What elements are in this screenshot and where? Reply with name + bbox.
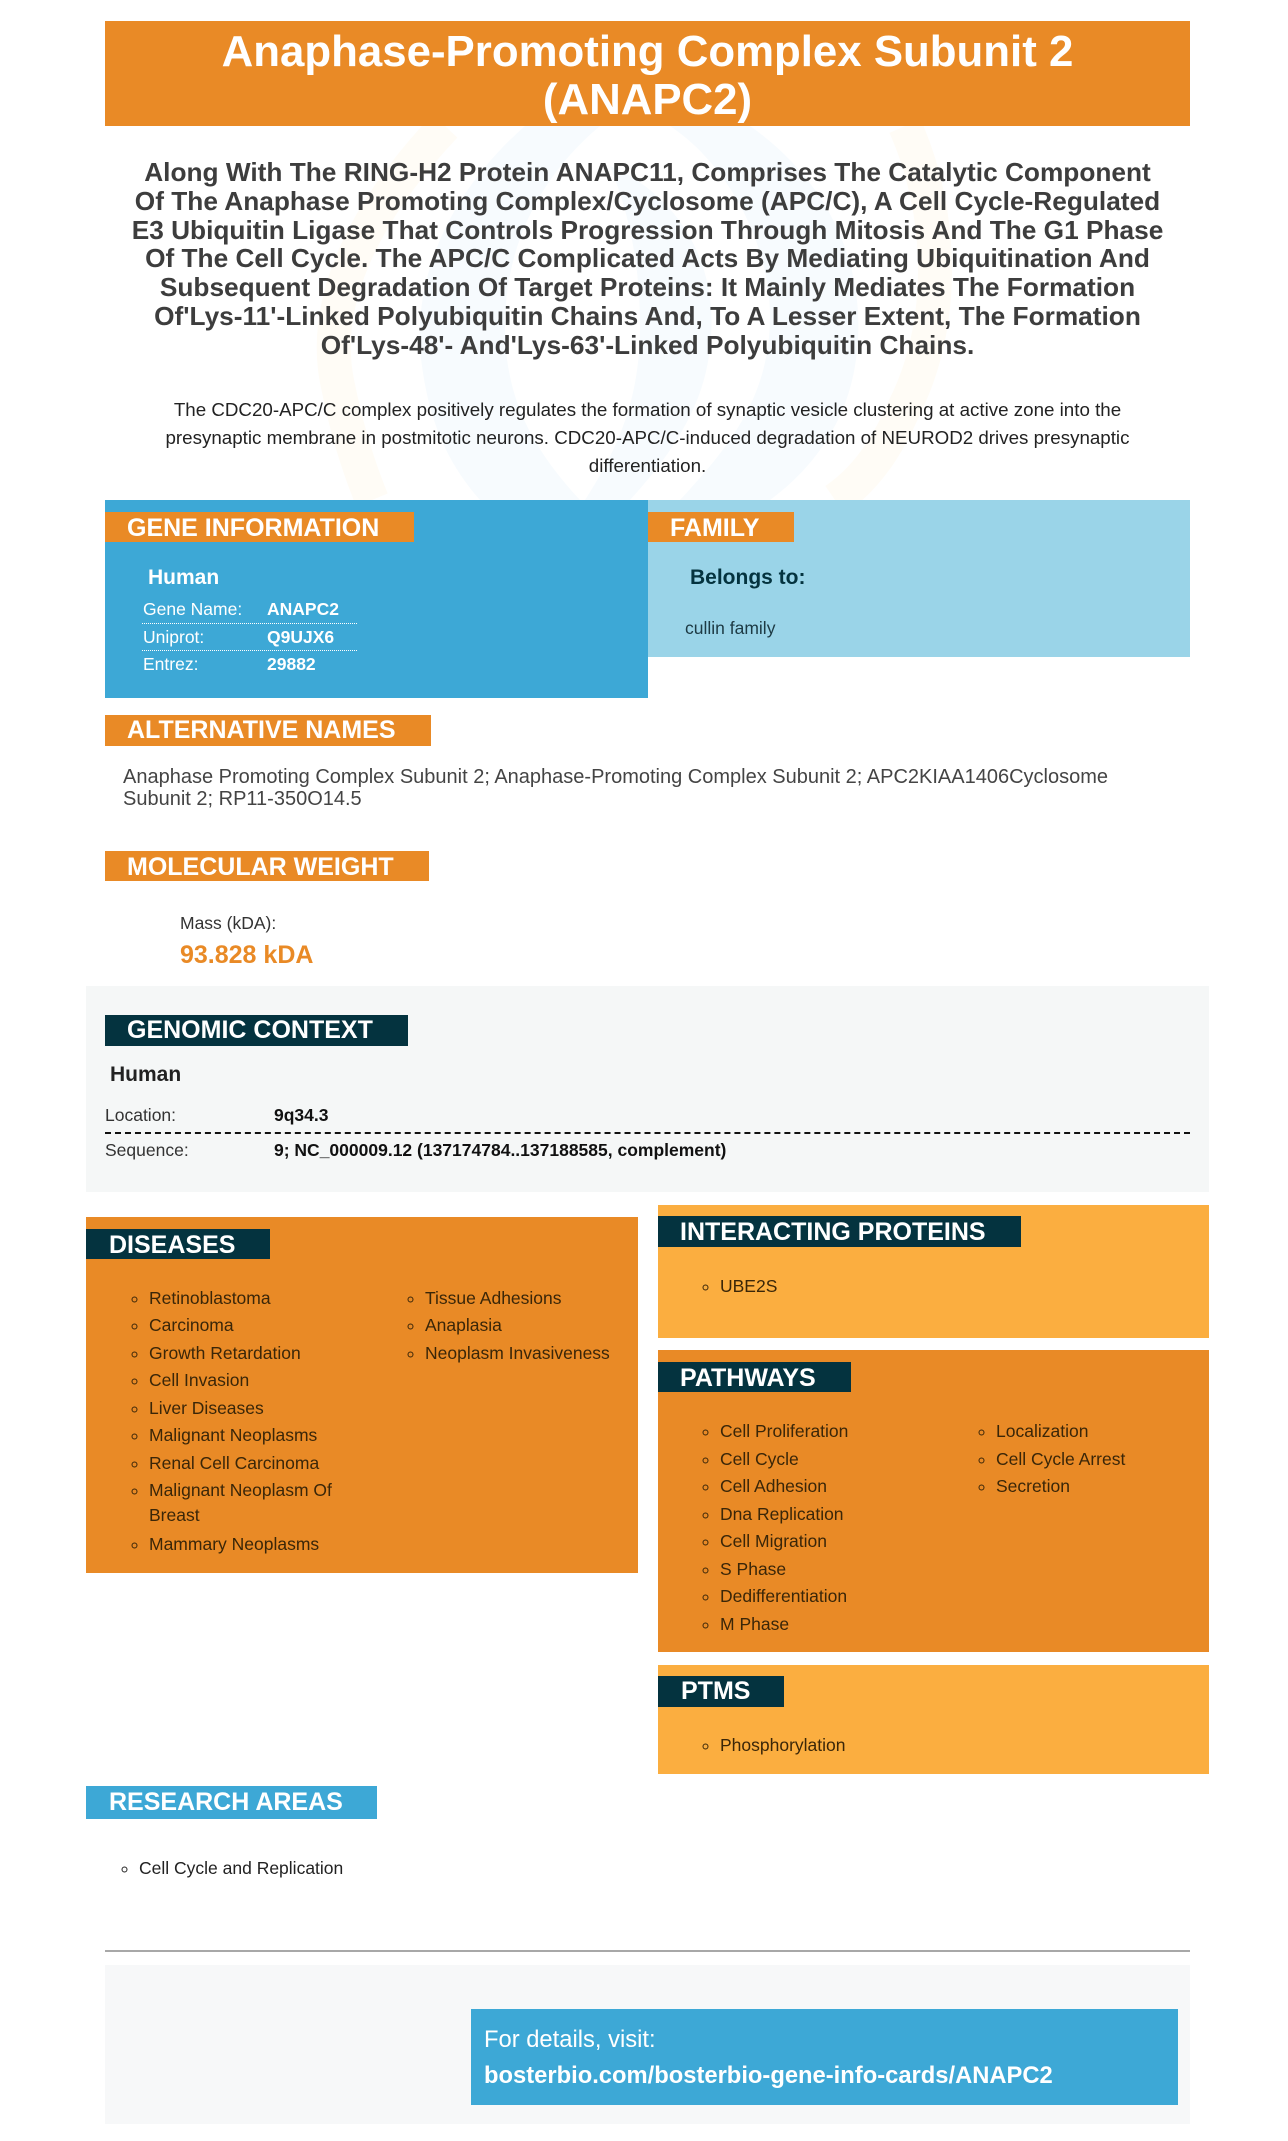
subtitle text: E3 Ubiquitin Ligase That Controls Progression Through Mitosis And The G1 Phase: [132, 215, 1163, 245]
species label: Human: [110, 1063, 181, 1086]
pathways list column 1: Cell Proliferation: [720, 1421, 848, 1441]
callout: details link: For details, visit:: [484, 2026, 656, 2053]
heading: family: [648, 512, 794, 542]
heading: molecular weight: MOLECULAR WEIGHT: [127, 853, 394, 881]
heading: ptms: PTMS: [681, 1677, 750, 1705]
pathways list column 1: Dna Replication: [720, 1504, 844, 1524]
heading: diseases: [86, 1229, 270, 1259]
panel: footer: [105, 1965, 1190, 2124]
pathways list column 2: Localization: [996, 1421, 1088, 1441]
gene info rows: ANAPC2: [267, 599, 339, 619]
heading: family: FAMILY: [670, 514, 759, 542]
subtitle text: Of'Lys-48'- And'Lys-63'-Linked Polyubiquitin Chains.: [321, 330, 974, 360]
ptms list: Phosphorylation: [720, 1735, 846, 1755]
pathways list column 2: [978, 1421, 1126, 1496]
pathways list column 1: S Phase: [720, 1558, 786, 1578]
heading: gene information: GENE INFORMATION: [127, 514, 379, 542]
diseases list column 1: Growth Retardation: [149, 1342, 301, 1362]
diseases list column 1: Mammary Neoplasms: [149, 1534, 319, 1554]
pathways list column 2: Secretion: [996, 1476, 1070, 1496]
mass label: Mass (kDA):: [180, 913, 276, 933]
diseases list column 1: Retinoblastoma: [149, 1288, 271, 1308]
heading: ptms: [658, 1676, 784, 1707]
heading: interacting proteins: INTERACTING PROTEINS: [680, 1218, 986, 1246]
subtitle text: Of The Anaphase Promoting Complex/Cyclosome (APC/C), A Cell Cycle-Regulated: [135, 186, 1160, 216]
alternative names text: Subunit 2; RP11-350O14.5: [123, 788, 362, 810]
sequence row: Sequence:: [105, 1140, 189, 1160]
pathways list column 1: M Phase: [720, 1614, 789, 1634]
gene info rows: Entrez:: [143, 654, 198, 674]
diseases list column 1: Malignant Neoplasms: [149, 1425, 317, 1445]
description text: The CDC20-APC/C complex positively regulates the formation of synaptic vesicle clustering at active zone into the: [174, 399, 1121, 420]
alternative names text: [123, 766, 1108, 810]
gene info rows: 29882: [267, 654, 316, 674]
title: [105, 21, 1190, 126]
heading: research areas: RESEARCH AREAS: [109, 1788, 343, 1816]
gene info rows: Uniprot:: [143, 627, 204, 647]
panel: genomic context: [86, 986, 1209, 1192]
diseases list column 1: Malignant Neoplasm Of: [149, 1480, 332, 1500]
alternative names text: Anaphase Promoting Complex Subunit 2; Anaphase-Promoting Complex Subunit 2; APC2KIAA1406Cyclosome: [123, 766, 1108, 788]
panel: diseases: [86, 1217, 638, 1573]
diseases list column 2: [408, 1288, 610, 1362]
heading: research areas: [86, 1786, 377, 1819]
research areas list: Cell Cycle and Replication: [139, 1858, 343, 1878]
title: (ANAPC2): [543, 75, 752, 124]
subtitle text: Of The Cell Cycle. The APC/C Complicated Acts By Mediating Ubiquitination And: [145, 243, 1150, 273]
panel: interacting proteins: [658, 1205, 1209, 1338]
diseases list column 1: Breast: [149, 1505, 200, 1525]
description text: differentiation.: [589, 455, 706, 476]
gene info rows: Gene Name:: [143, 599, 242, 619]
location row: [105, 1105, 328, 1125]
pathways list column 1: [702, 1421, 848, 1634]
heading: pathways: PATHWAYS: [680, 1364, 816, 1392]
panel: pathways: [658, 1350, 1209, 1652]
location row: 9q34.3: [274, 1105, 328, 1125]
panel: gene information: [105, 500, 648, 698]
description text: [166, 399, 1129, 476]
callout: details link: bosterbio.com/bosterbio-gene-info-cards/ANAPC2: [484, 2062, 1053, 2089]
watermark logo: [317, 126, 952, 500]
pathways list column 1: Cell Migration: [720, 1531, 827, 1551]
subtitle text: [132, 157, 1163, 360]
heading: alternative names: ALTERNATIVE NAMES: [127, 716, 396, 744]
callout: details link: [471, 2009, 1178, 2105]
diseases list column 2: Anaplasia: [425, 1315, 502, 1335]
subtitle text: Along With The RING-H2 Protein ANAPC11, Comprises The Catalytic Component: [144, 157, 1151, 187]
heading: pathways: [658, 1362, 851, 1392]
pathways list column 1: Dedifferentiation: [720, 1586, 847, 1606]
diseases list column 1: Cell Invasion: [149, 1370, 249, 1390]
gene info rows: [142, 599, 357, 674]
gene info rows: Q9UJX6: [267, 627, 334, 647]
subtitle text: Subsequent Degradation Of Target Proteins: It Mainly Mediates The Formation: [160, 272, 1135, 302]
family value: cullin family: [685, 618, 775, 638]
panel: ptms: [658, 1665, 1209, 1774]
belongs to label: Belongs to:: [690, 566, 806, 589]
panel: family: [648, 500, 1190, 657]
title: Anaphase-Promoting Complex Subunit 2: [222, 27, 1073, 76]
pathways list column 2: Cell Cycle Arrest: [996, 1448, 1125, 1468]
subtitle text: Of'Lys-11'-Linked Polyubiquitin Chains And, To A Lesser Extent, The Formation: [154, 301, 1141, 331]
species label: Human: [148, 566, 219, 589]
sequence row: 9; NC_000009.12 (137174784..137188585, complement): [274, 1140, 726, 1160]
diseases list column 1: Renal Cell Carcinoma: [149, 1452, 319, 1472]
description text: presynaptic membrane in postmitotic neurons. CDC20-APC/C-induced degradation of NEUROD2 drives presynaptic: [166, 427, 1129, 448]
diseases list column 1: [132, 1288, 332, 1554]
interacting proteins list: UBE2S: [720, 1276, 777, 1296]
diseases list column 2: Tissue Adhesions: [425, 1288, 562, 1308]
diseases list column 2: Neoplasm Invasiveness: [425, 1342, 610, 1362]
heading: genomic context: GENOMIC CONTEXT: [127, 1016, 373, 1044]
diseases list column 1: Liver Diseases: [149, 1398, 264, 1418]
pathways list column 1: Cell Cycle: [720, 1448, 799, 1468]
mass value: 93.828 kDA: [180, 941, 313, 969]
pathways list column 1: Cell Adhesion: [720, 1476, 827, 1496]
heading: diseases: DISEASES: [109, 1231, 235, 1259]
location row: Location:: [105, 1105, 176, 1125]
diseases list column 1: Carcinoma: [149, 1315, 234, 1335]
